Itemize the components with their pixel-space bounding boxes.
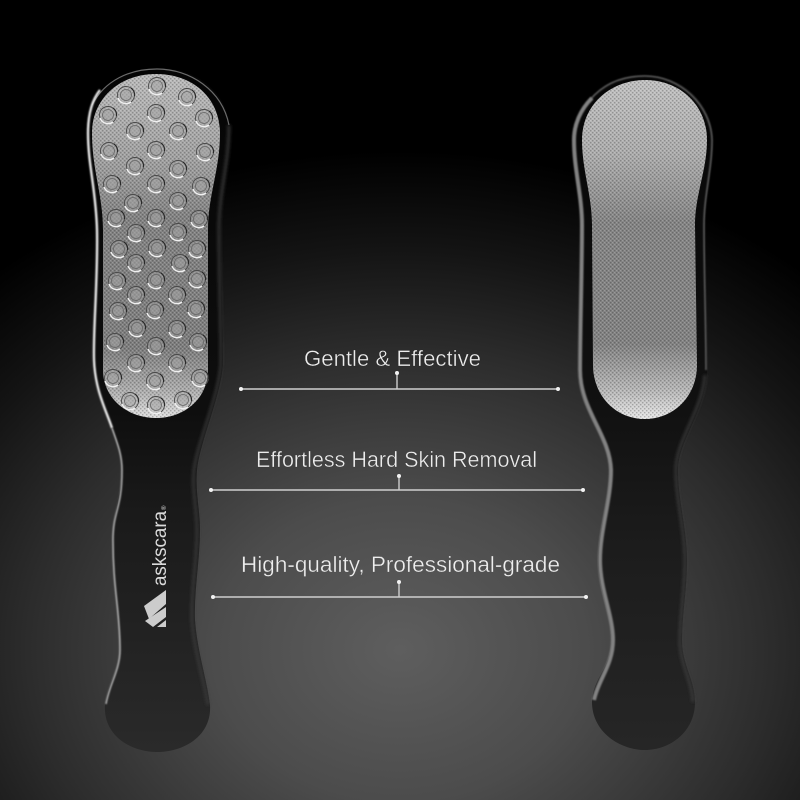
callout text: High-quality, Professional-grade [241,552,560,577]
callout bracket [239,371,560,391]
right file lower right sheen [676,375,705,702]
right file left edge highlight [574,98,613,700]
right file top and right rim [590,76,712,370]
callout: effortless hard skin removal [209,447,585,492]
panel: left foot file, textured side [87,68,230,752]
left file top rim [92,69,229,125]
left file metal plate [92,74,220,418]
left file upper edge highlight [88,90,112,428]
callout text: Effortless Hard Skin Removal [256,447,537,472]
right file handle [572,75,713,750]
right file metal texture [582,80,707,419]
panel: right foot file, fine side [572,75,713,750]
logo mark [144,590,166,627]
callout: gentle and effective [239,346,560,391]
callout bracket [209,474,585,492]
left file metal texture [92,74,220,418]
callout text: Gentle & Effective [304,346,481,371]
brand name: askscara [149,511,171,586]
left file right edge sheen [192,125,229,705]
callout bracket [211,580,588,599]
brand logo [144,505,171,627]
left file lower edge highlight [106,428,122,704]
left file handle [87,68,230,752]
left file raised bumps [100,78,214,414]
callout: high quality professional grade [211,552,588,599]
registered mark: ® [161,505,168,510]
right file metal plate [582,80,707,419]
